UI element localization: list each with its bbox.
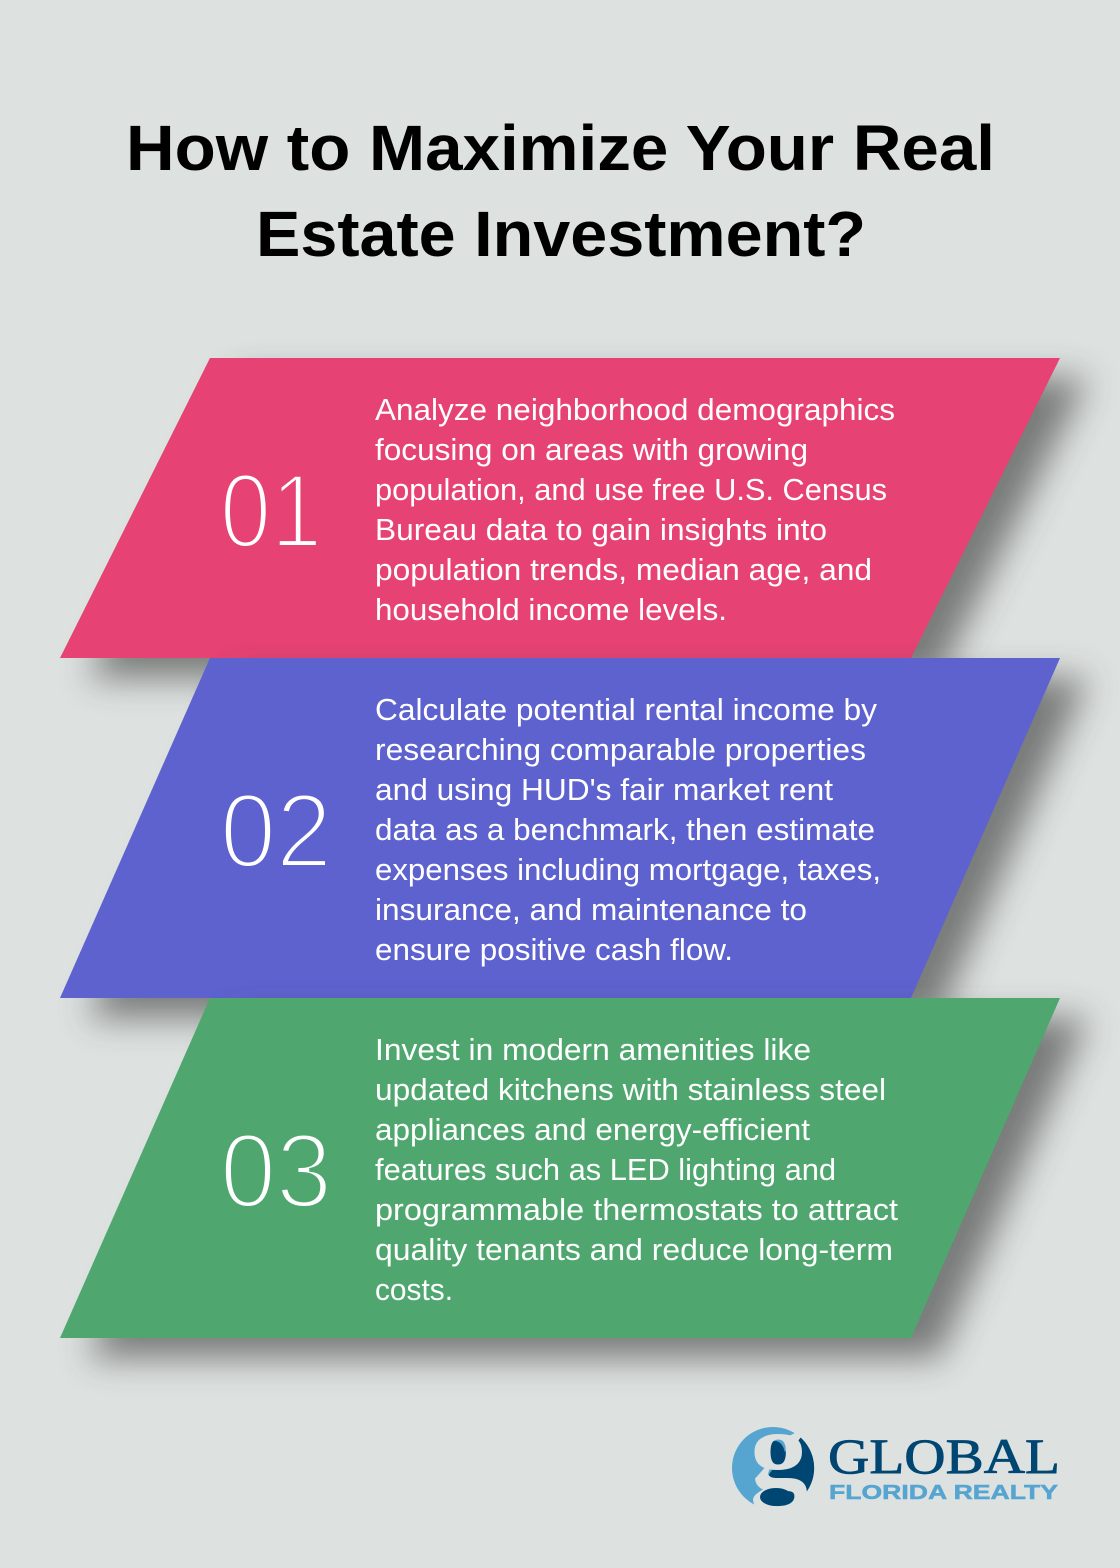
title	[126, 112, 995, 270]
icon: circular g monogram	[732, 1388, 814, 1512]
panel: step 02	[60, 658, 1060, 998]
step number 03: 03	[220, 1113, 332, 1230]
step 01 text: Bureau data to gain insights into	[375, 512, 827, 547]
step 01 text: Analyze neighborhood demographics	[375, 392, 895, 427]
step 02 text	[375, 692, 881, 967]
logo tagline: FLORIDA REALTY	[829, 1482, 1059, 1504]
step 02 text: Calculate potential rental income by	[375, 692, 877, 727]
step 02 text: expenses including mortgage, taxes,	[375, 852, 881, 887]
step 01 text: focusing on areas with growing	[375, 432, 808, 467]
step 03 text: appliances and energy-efficient	[375, 1112, 810, 1147]
step 02 text: and using HUD's fair market rent	[375, 772, 833, 807]
step 02 text: researching comparable properties	[375, 732, 866, 767]
step 01 text	[375, 392, 895, 627]
panel shape: indigo parallelogram	[60, 658, 1060, 998]
step 03 text: updated kitchens with stainless steel	[375, 1072, 886, 1107]
step 03 text: quality tenants and reduce long-term	[375, 1232, 893, 1267]
step number 01: 01	[220, 453, 322, 570]
panel: step 01	[60, 358, 1060, 658]
step 01 text: population trends, median age, and	[375, 552, 872, 587]
step 01 text: household income levels.	[375, 592, 727, 627]
step 02 text: ensure positive cash flow.	[375, 932, 733, 967]
step number 02: 02	[220, 773, 332, 890]
step 01 text: population, and use free U.S. Census	[375, 472, 887, 507]
logo wordmark: GLOBAL	[828, 1428, 1060, 1484]
title: How to Maximize Your Real	[126, 112, 995, 184]
step 03 text	[375, 1032, 898, 1307]
icon: circular g monogram: g	[750, 1388, 808, 1512]
step 03 text: programmable thermostats to attract	[375, 1192, 898, 1227]
step 03 text: Invest in modern amenities like	[375, 1032, 811, 1067]
panel: step 03	[60, 998, 1060, 1338]
title: Estate Investment?	[256, 198, 866, 270]
logo: Global Florida Realty	[732, 1388, 1060, 1512]
panel shape: green parallelogram	[60, 998, 1060, 1338]
step 03 text: features such as LED lighting and	[375, 1152, 836, 1187]
step 02 text: insurance, and maintenance to	[375, 892, 807, 927]
step 02 text: data as a benchmark, then estimate	[375, 812, 875, 847]
panel shape: pink parallelogram	[60, 358, 1060, 658]
step 03 text: costs.	[375, 1272, 453, 1307]
